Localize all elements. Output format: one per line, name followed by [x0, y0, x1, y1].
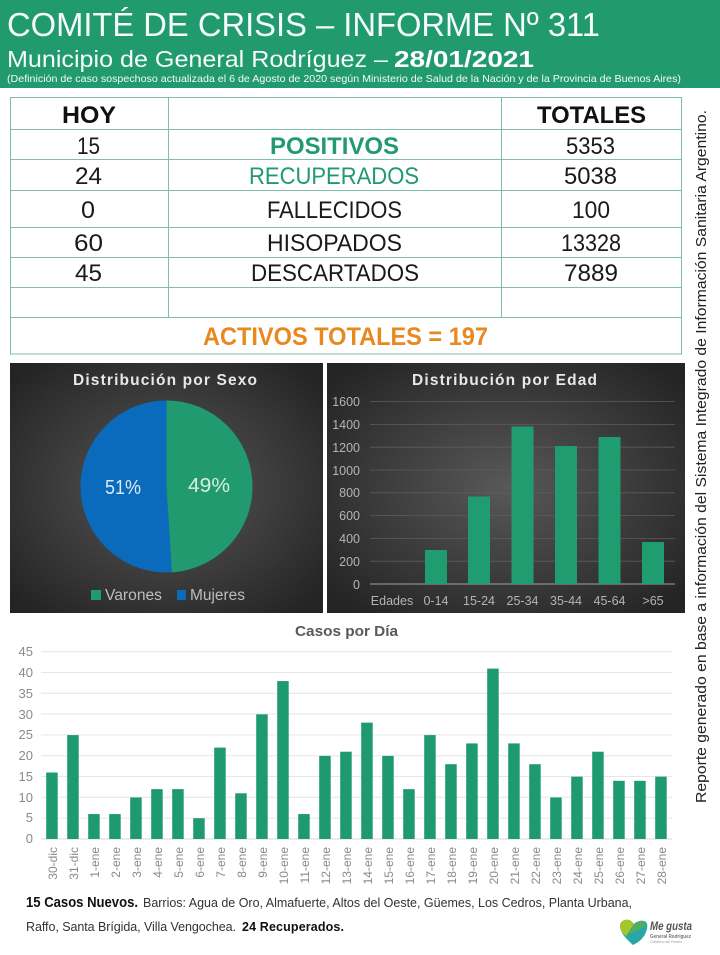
bar chart: casos diarios: 35: [19, 686, 33, 701]
row: hisopados: 60: [74, 230, 103, 257]
row: recuperados: [75, 163, 617, 190]
bar chart: casos diarios: 40: [19, 665, 33, 680]
bar chart: casos diarios: 9-ene: [256, 847, 270, 878]
bar chart: casos diarios: 27-ene: [634, 847, 648, 884]
bar chart: edad: 0-14: [423, 594, 449, 608]
side note: Reporte generado en base a información del Sistema Integrado de Información Sanitaria Argentino.: [693, 110, 710, 803]
row: fallecidos: [81, 197, 610, 224]
bar chart: edad: 200: [339, 555, 360, 569]
logo: me gusta: General Rodríguez: [650, 934, 691, 940]
row: hisopados: [74, 230, 621, 257]
pie chart: 51%: [105, 477, 141, 499]
subtitle: Municipio de General Rodríguez –: [7, 46, 388, 72]
bar chart: casos diarios: 2-ene: [109, 847, 123, 878]
definition note: (Definición de caso sospechoso actualizada el 6 de Agosto de 2020 según Ministerio de Salud de la Nación y de la Provincia de Buenos Aires): [7, 73, 681, 85]
bar chart: casos diarios: 45: [19, 644, 33, 659]
row: positivos: 15: [77, 133, 100, 160]
date: 28/01/2021: [394, 46, 534, 72]
bar chart: edad: 35-44: [550, 594, 582, 608]
bar chart: edad: Edades: [371, 594, 413, 608]
bar chart: edad: 15-24: [463, 594, 495, 608]
bar chart: casos diarios: 22-ene: [529, 847, 543, 884]
bar chart: casos diarios: 18-ene: [445, 847, 459, 884]
bar chart: casos diarios: 26-ene: [613, 847, 627, 884]
footer text: Raffo, Santa Brígida, Villa Vengochea.: [26, 920, 236, 934]
bar chart: edad: 400: [339, 532, 360, 546]
summary table: [10, 97, 682, 354]
row: hisopados: HISOPADOS: [267, 230, 402, 257]
bar chart: casos diarios: 25: [19, 727, 33, 742]
bar chart: casos diarios: 21-ene: [508, 847, 522, 884]
footer text: 15 Casos Nuevos.: [26, 894, 138, 911]
bar chart: casos diarios: 30-dic: [46, 847, 60, 880]
row: hisopados: 13328: [561, 230, 621, 257]
bar chart: edad: 1400: [332, 418, 360, 432]
icon: heart: [620, 920, 647, 945]
panel: casos por día: [19, 624, 672, 884]
row: descartados: DESCARTADOS: [251, 260, 419, 287]
row: recuperados: 5038: [564, 163, 617, 190]
logo text: Me gusta: [650, 921, 693, 933]
bar chart: casos diarios: 5: [26, 810, 33, 825]
bar chart: casos diarios: 31-dic: [67, 847, 81, 880]
bar chart: casos diarios: 23-ene: [550, 847, 564, 884]
footer text: [26, 894, 632, 934]
row: descartados: 7889: [564, 260, 618, 287]
bar chart: casos diarios: 15: [19, 769, 33, 784]
row: positivos: [77, 133, 615, 160]
logo: me gusta: Gobierno del Pueblo: [650, 939, 683, 944]
bar chart: casos diarios: 3-ene: [130, 847, 144, 878]
bar chart: casos diarios: [19, 644, 672, 884]
row: recuperados: 24: [75, 163, 102, 190]
bar chart: casos diarios: 14-ene: [361, 847, 375, 884]
bar chart: casos diarios: 30: [19, 707, 33, 722]
legend: Mujeres: [190, 587, 245, 604]
bar chart: edad: [332, 395, 675, 608]
panel: distribución por sexo: [10, 363, 323, 613]
bar chart: edad: 800: [339, 486, 360, 500]
bar chart: edad: 45-64: [594, 594, 626, 608]
column heading: totales: TOTALES: [537, 102, 646, 129]
bar chart: edad: 1200: [332, 441, 360, 455]
bar chart: casos diarios: 5-ene: [172, 847, 186, 878]
bar chart: edad: 1600: [332, 395, 360, 409]
bar chart: casos diarios: 25-ene: [592, 847, 606, 884]
row: fallecidos: 100: [572, 197, 610, 224]
activos totales: ACTIVOS TOTALES = 197: [203, 323, 488, 351]
bar chart: casos diarios: 12-ene: [319, 847, 333, 884]
row: fallecidos: FALLECIDOS: [267, 197, 402, 224]
panel heading: Distribución por Sexo: [73, 372, 257, 389]
bar chart: casos diarios: 6-ene: [193, 847, 207, 878]
bar chart: casos diarios: 1-ene: [88, 847, 102, 878]
row: descartados: [75, 260, 618, 287]
bar chart: edad: 1000: [332, 464, 360, 478]
footer text: Barrios: Agua de Oro, Almafuerte, Altos del Oeste, Güemes, Los Cedros, Planta Urbana,: [143, 896, 632, 910]
chart heading: Casos por Día: [295, 624, 399, 640]
bar chart: casos diarios: 24-ene: [571, 847, 585, 884]
bar chart: casos diarios: 10-ene: [277, 847, 291, 884]
bar chart: casos diarios: 10: [19, 790, 33, 805]
panel: distribución por edad: [327, 363, 685, 613]
bar chart: casos diarios: 20-ene: [487, 847, 501, 884]
legend: [91, 587, 245, 604]
title: COMITÉ DE CRISIS – INFORME Nº 311: [7, 7, 600, 44]
bar chart: casos diarios: 7-ene: [214, 847, 228, 878]
bar chart: casos diarios: 4-ene: [151, 847, 165, 878]
row: fallecidos: 0: [81, 197, 95, 224]
bar chart: edad: 0: [353, 578, 360, 592]
row: positivos: 5353: [566, 133, 615, 160]
bar chart: casos diarios: 16-ene: [403, 847, 417, 884]
bar chart: edad: >65: [642, 594, 664, 608]
bar chart: casos diarios: 17-ene: [424, 847, 438, 884]
column heading: hoy: HOY: [62, 102, 116, 129]
bar chart: casos diarios: 8-ene: [235, 847, 249, 878]
pie chart: 49%: [188, 475, 230, 497]
bar chart: edad: 600: [339, 509, 360, 523]
row: positivos: POSITIVOS: [270, 133, 399, 160]
panel heading: Distribución por Edad: [412, 372, 597, 389]
bar chart: casos diarios: 0: [26, 831, 33, 846]
row: descartados: 45: [75, 260, 102, 287]
bar chart: casos diarios: 28-ene: [655, 847, 669, 884]
bar chart: casos diarios: 19-ene: [466, 847, 480, 884]
bar chart: edad: 25-34: [507, 594, 539, 608]
bar chart: casos diarios: 11-ene: [298, 847, 312, 883]
bar chart: casos diarios: 15-ene: [382, 847, 396, 884]
bar chart: casos diarios: 20: [19, 748, 33, 763]
header band: [0, 0, 720, 88]
footer text: 24 Recuperados.: [242, 920, 344, 934]
bar chart: casos diarios: 13-ene: [340, 847, 354, 884]
legend: Varones: [105, 587, 162, 604]
row: recuperados: RECUPERADOS: [249, 163, 419, 190]
logo: me gusta: [620, 920, 693, 945]
pie chart: [80, 400, 252, 572]
